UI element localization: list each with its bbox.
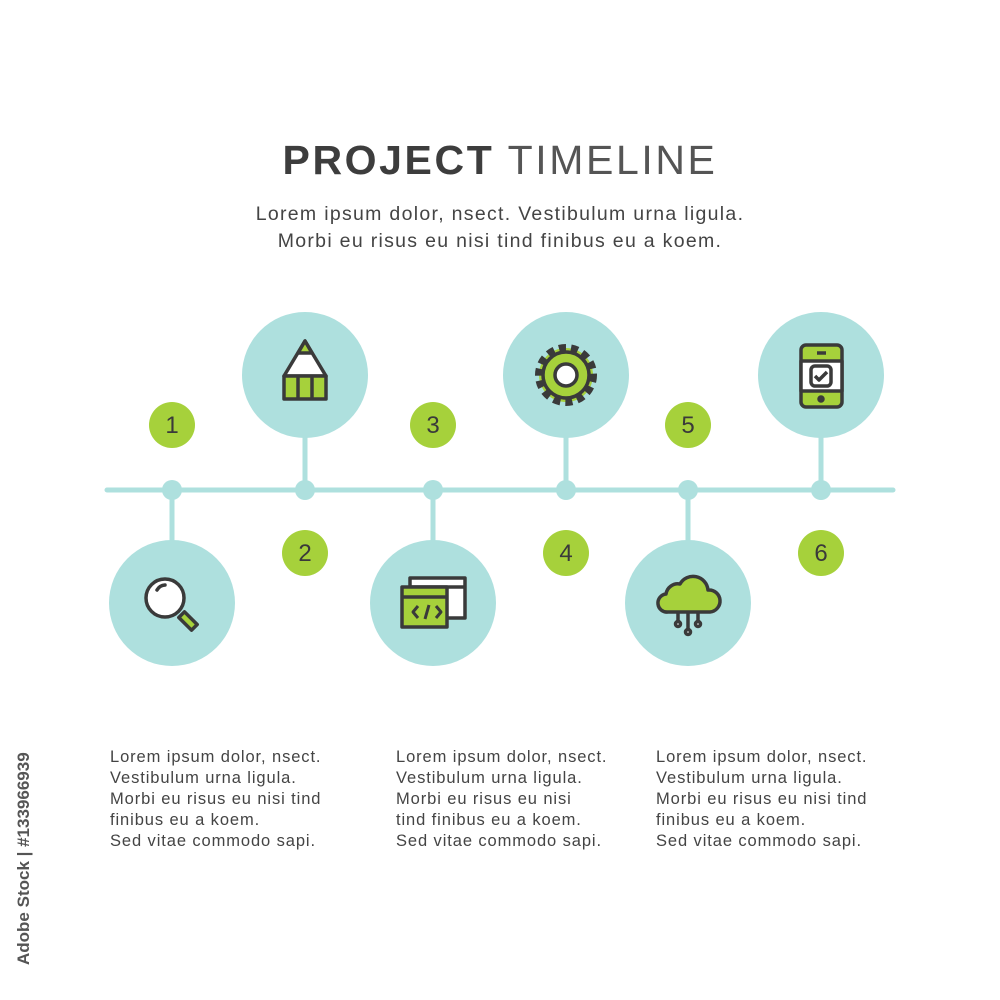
timeline axis	[107, 435, 893, 545]
subtitle	[256, 203, 744, 252]
number badges: 3	[426, 412, 440, 439]
number badges	[149, 402, 844, 576]
number badges: 5	[681, 412, 695, 439]
text block 3: Lorem ipsum dolor, nsect.	[656, 748, 867, 766]
text block 1: Lorem ipsum dolor, nsect.	[110, 748, 321, 766]
icon: gear	[503, 312, 629, 438]
text block 2: Lorem ipsum dolor, nsect.	[396, 748, 607, 766]
number badges: 1	[165, 412, 179, 439]
text block 3: Sed vitae commodo sapi.	[656, 832, 862, 850]
text block 3: Morbi eu risus eu nisi tind	[656, 790, 867, 808]
watermark id: Adobe Stock | #133966939	[14, 752, 33, 965]
text block 3: Vestibulum urna ligula.	[656, 769, 843, 787]
subtitle: Lorem ipsum dolor, nsect. Vestibulum urna ligula.	[256, 203, 744, 225]
text block 2: tind finibus eu a koem.	[396, 811, 582, 829]
text block 2	[396, 748, 607, 850]
text block 2: Vestibulum urna ligula.	[396, 769, 583, 787]
icon: pencil	[242, 312, 368, 438]
text block 3	[656, 748, 867, 850]
icon: cloud	[625, 540, 751, 666]
text block 2: Sed vitae commodo sapi.	[396, 832, 602, 850]
text block 1: Vestibulum urna ligula.	[110, 769, 297, 787]
icon: code windows	[370, 540, 496, 666]
number badges: 4	[559, 540, 573, 567]
icon: phone	[758, 312, 884, 438]
text block 1: Sed vitae commodo sapi.	[110, 832, 316, 850]
number badges: 6	[814, 540, 828, 567]
text block 3: finibus eu a koem.	[656, 811, 806, 829]
text block 1: finibus eu a koem.	[110, 811, 260, 829]
title: PROJECT TIMELINE	[282, 137, 718, 183]
text block 1: Morbi eu risus eu nisi tind	[110, 790, 321, 808]
text block 2: Morbi eu risus eu nisi	[396, 790, 572, 808]
subtitle: Morbi eu risus eu nisi tind finibus eu a koem.	[278, 230, 722, 252]
text block 1	[110, 748, 321, 850]
icon: magnifier	[109, 540, 235, 666]
number badges: 2	[298, 540, 312, 567]
